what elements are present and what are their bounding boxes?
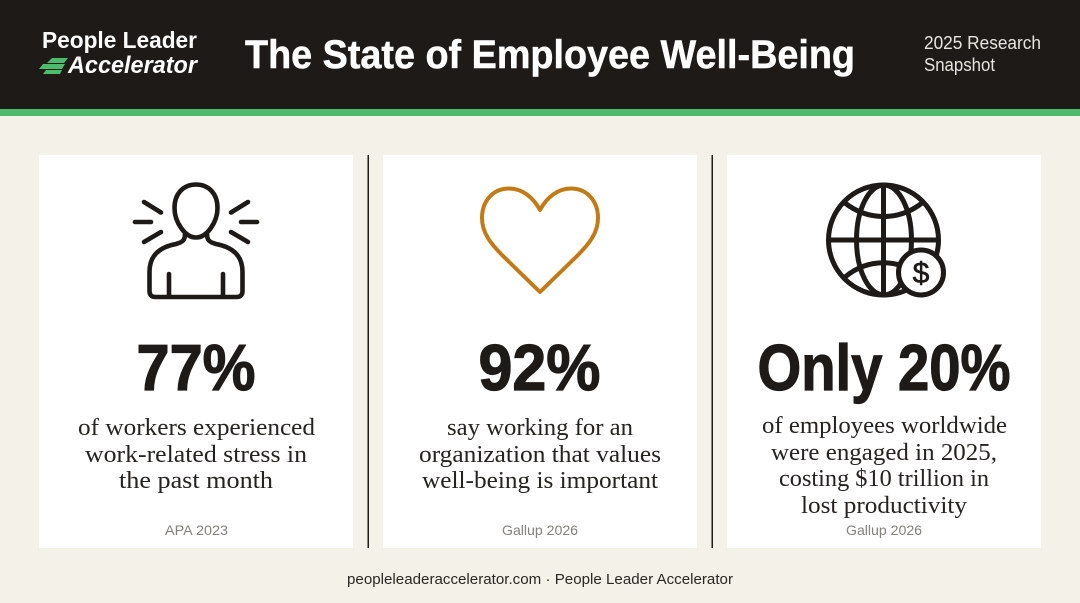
logo: People Leader Accelerator: People Leader <box>42 27 197 53</box>
description: costing $10 trillion in <box>779 466 989 492</box>
source: Gallup 2026 <box>846 522 922 538</box>
panel: stress <box>39 155 353 548</box>
footer: peopleleaderaccelerator.com · People Leader Accelerator <box>347 571 733 588</box>
panel: engagement <box>727 155 1041 548</box>
description: the past month <box>119 468 273 494</box>
icon: green speed bars <box>39 58 68 74</box>
report label <box>924 33 1041 75</box>
description: were engaged in 2025, <box>771 440 997 466</box>
divider <box>712 155 713 548</box>
icon: heart <box>482 188 598 292</box>
description: organization that values <box>419 442 661 468</box>
description: lost productivity <box>801 493 967 519</box>
description <box>419 415 661 494</box>
report label: 2025 Research <box>924 33 1041 53</box>
description: of employees worldwide <box>762 413 1007 439</box>
icon: stressed person <box>135 184 257 297</box>
statistic: 92% <box>478 331 600 404</box>
description <box>762 413 1007 519</box>
icon: globe with dollar coin: $ <box>913 257 930 290</box>
icon: globe with dollar coin <box>828 185 944 295</box>
source: Gallup 2026 <box>502 522 578 538</box>
description: well-being is important <box>422 468 658 494</box>
description: work-related stress in <box>85 442 307 468</box>
divider <box>368 155 369 548</box>
panel: well-being <box>383 155 697 548</box>
report label: Snapshot <box>924 55 995 75</box>
statistic: 77% <box>136 331 256 404</box>
source: APA 2023 <box>165 522 228 538</box>
header band <box>0 0 1080 116</box>
logo: People Leader Accelerator: Accelerator <box>67 52 199 79</box>
logo: People Leader Accelerator <box>39 27 199 79</box>
title: The State of Employee Well-Being <box>245 33 855 77</box>
description: of workers experienced <box>78 415 315 441</box>
description: say working for an <box>447 415 633 441</box>
statistic: Only 20% <box>758 331 1010 404</box>
description <box>78 415 315 494</box>
